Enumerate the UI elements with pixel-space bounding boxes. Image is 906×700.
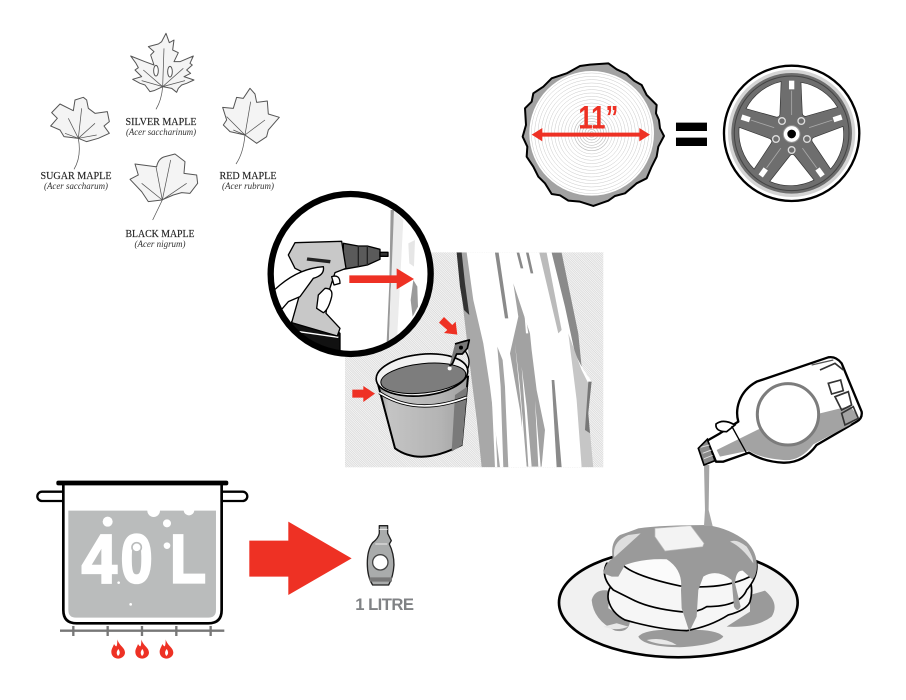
icon: car wheel: [724, 66, 859, 202]
pot lid rim: [56, 481, 228, 485]
icon: sap bucket: [374, 350, 470, 457]
panel: drill detail circle: [267, 194, 431, 357]
circle frame: [271, 194, 431, 354]
icon: flames: [111, 639, 173, 659]
label: 1 litre: 1 LITRE: [355, 595, 414, 614]
tree bark in detail: [386, 210, 394, 342]
drill chuck: [275, 240, 389, 350]
pot body: [63, 483, 222, 623]
panel: tapping the tree: [267, 194, 603, 467]
syrup on pancakes: [603, 525, 757, 632]
arrow: boils down to: [249, 522, 352, 595]
sugar maple leaf: [51, 97, 109, 169]
red maple leaf: [223, 88, 279, 164]
water: [68, 511, 216, 618]
panel: syrup on pancakes: [559, 357, 862, 657]
drill battery: [291, 321, 341, 350]
icon: small syrup bottle: [367, 526, 394, 585]
syrup pool on plate: [592, 590, 775, 647]
icon: tree cross-section: [523, 63, 664, 206]
hand: [275, 266, 324, 310]
pancake stack: [604, 553, 757, 631]
syrup stream: [704, 465, 713, 526]
panel: tree diameter comparison: [523, 63, 859, 206]
arrow: drilling direction: [349, 268, 414, 289]
pot handles: [37, 492, 247, 501]
volume label: 0: [121, 522, 153, 598]
diameter arrow: [532, 128, 650, 141]
stove burner: [60, 626, 224, 636]
icon: syrup bottle pouring: [698, 357, 862, 465]
label: acer rubrum: (Acer rubrum): [222, 181, 274, 191]
panel: boiling sap: [37, 481, 414, 659]
label: acer saccharum: (Acer saccharum): [44, 181, 108, 191]
icon: spout: [448, 340, 469, 370]
silver maple leaf: [131, 33, 194, 109]
arrow: to spout: [439, 317, 457, 335]
equals sign: [676, 123, 707, 146]
black maple leaf: [130, 154, 198, 220]
label: silver maple: SILVER MAPLE: [126, 117, 196, 128]
hatched background: [345, 252, 603, 467]
volume label: L: [170, 522, 206, 598]
volume label: [82, 522, 206, 598]
arrow: to bucket: [352, 386, 375, 402]
butter pat: [655, 526, 704, 551]
label: acer nigrum: (Acer nigrum): [134, 239, 186, 249]
label: black maple: BLACK MAPLE: [126, 229, 194, 240]
drill body: [288, 241, 346, 336]
label: sugar maple: SUGAR MAPLE: [40, 171, 112, 182]
bubbles: [103, 504, 194, 606]
wheel windows: [724, 74, 854, 202]
diameter label: 11”: [578, 98, 618, 135]
volume label: 4: [82, 522, 117, 598]
plate: [559, 548, 798, 657]
syrup highlights: [614, 533, 753, 563]
label: red maple: RED MAPLE: [220, 171, 276, 182]
tree trunk: [457, 252, 593, 467]
panel: maple leaf species: [40, 33, 279, 249]
label: acer saccharinum: (Acer saccharinum): [126, 127, 196, 137]
